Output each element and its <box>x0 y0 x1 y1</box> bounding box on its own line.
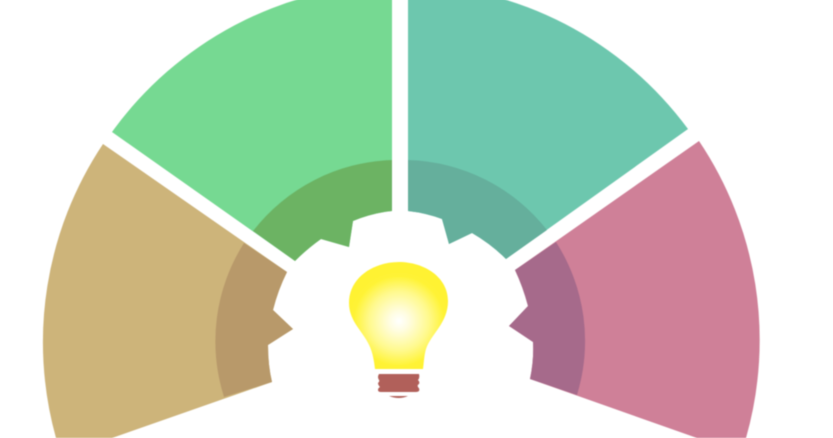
teal inner gear band <box>408 160 547 259</box>
bulb glass <box>349 262 448 369</box>
green inner gear band <box>253 160 392 261</box>
bulb screw base <box>378 374 419 392</box>
bulb tip <box>389 396 408 398</box>
pink inner gear band <box>509 242 585 395</box>
panel: green segment <box>112 0 392 261</box>
tan inner gear band <box>215 243 293 397</box>
icon: lightbulb <box>349 262 448 398</box>
panel: teal segment <box>408 0 688 259</box>
panel: tan segment <box>43 144 293 438</box>
panel: pink segment <box>509 141 760 438</box>
